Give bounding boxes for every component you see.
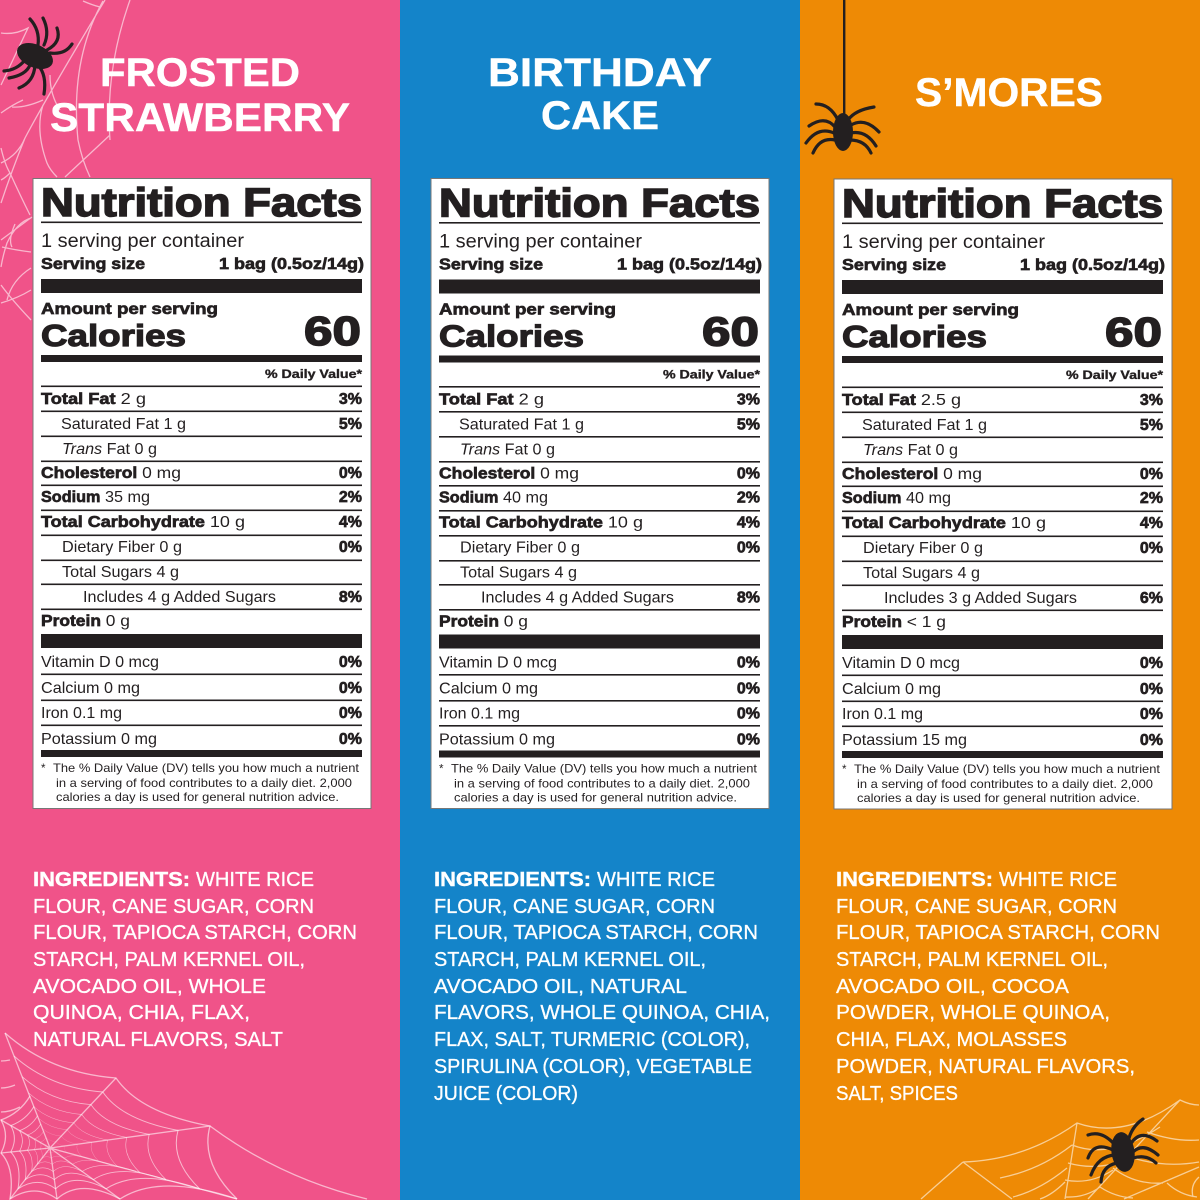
row: added sugars: 6% xyxy=(1140,590,1163,607)
row: calcium: 0% xyxy=(737,680,760,698)
footnote xyxy=(842,763,1161,805)
row: calcium: 0% xyxy=(1140,681,1163,698)
calories xyxy=(41,308,361,354)
row: iron xyxy=(41,705,362,722)
row: iron: 0% xyxy=(339,705,362,722)
row: total fat: 3% xyxy=(339,391,362,408)
row: total carbohydrate: 4% xyxy=(1140,515,1163,532)
row: vitamin d: 0% xyxy=(1140,655,1163,672)
row: iron: Iron 0.1 mg xyxy=(439,706,520,722)
ingredients: Birthday Cake: AVOCADO OIL, NATURAL xyxy=(434,975,687,998)
row: sodium: 2% xyxy=(737,490,760,506)
title: Frosted Strawberry xyxy=(50,51,350,140)
row: potassium: 0% xyxy=(1140,732,1163,749)
footnote: in a serving of food contributes to a daily diet. 2,000 xyxy=(857,778,1153,791)
footnote xyxy=(439,762,758,804)
row: added sugars: Includes 4 g Added Sugars xyxy=(481,590,674,606)
calories xyxy=(439,308,759,354)
row: calcium: Calcium 0 mg xyxy=(439,680,538,698)
row: trans fat: Trans Fat 0 g xyxy=(62,441,157,458)
ingredients: Birthday Cake: FLAX, SALT, TURMERIC (COLOR), xyxy=(434,1028,750,1051)
row: total fat: Total Fat 2 g xyxy=(439,392,544,408)
row: sodium xyxy=(842,490,1163,507)
ingredients: S'mores: AVOCADO OIL, COCOA xyxy=(836,975,1069,998)
row: cholesterol: Cholesterol 0 mg xyxy=(41,465,181,482)
ingredients: Birthday Cake: FLAVORS, WHOLE QUINOA, CHIA, xyxy=(434,1001,770,1024)
row: potassium xyxy=(842,732,1163,749)
ingredients: S'mores: STARCH, PALM KERNEL OIL, xyxy=(836,948,1108,971)
row: sodium: Sodium 40 mg xyxy=(842,490,951,507)
row: total fat: 3% xyxy=(1140,392,1163,409)
row: protein: Protein 0 g xyxy=(41,613,130,630)
row: vitamin d: Vitamin D 0 mcg xyxy=(439,654,557,672)
serving size xyxy=(41,256,364,273)
ingredients: Frosted Strawberry: INGREDIENTS: xyxy=(33,868,190,891)
serving size: Serving size xyxy=(41,256,145,273)
heading: Nutrition Facts: Nutrition Facts xyxy=(842,182,1163,226)
calories xyxy=(842,309,1162,355)
row: total sugars: Total Sugars 4 g xyxy=(62,564,179,581)
ingredients: Frosted Strawberry: AVOCADO OIL, WHOLE xyxy=(33,975,266,998)
calories: Calories xyxy=(41,318,186,353)
row: vitamin d: Vitamin D 0 mcg xyxy=(41,654,159,671)
title: Birthday Cake: BIRTHDAY xyxy=(488,51,712,95)
footnote: * xyxy=(842,763,847,776)
footnote: * xyxy=(439,762,444,776)
row: saturated fat: Saturated Fat 1 g xyxy=(61,416,186,433)
row: trans fat: Trans Fat 0 g xyxy=(460,442,555,458)
ingredients: Frosted Strawberry: QUINOA, CHIA, FLAX, xyxy=(33,1001,250,1024)
icon: hanging spider with thread xyxy=(806,0,879,153)
row: cholesterol: Cholesterol 0 mg xyxy=(439,466,579,482)
footnote: in a serving of food contributes to a daily diet. 2,000 xyxy=(454,778,750,790)
row: added sugars: Includes 3 g Added Sugars xyxy=(884,590,1077,607)
ingredients: Birthday Cake: JUICE (COLOR) xyxy=(434,1082,578,1105)
ingredients: Frosted Strawberry: STARCH, PALM KERNEL OIL, xyxy=(33,948,305,971)
ingredients: S'mores: CHIA, FLAX, MOLASSES xyxy=(836,1028,1067,1051)
row: cholesterol: Cholesterol 0 mg xyxy=(842,466,982,483)
row: iron: 0% xyxy=(1140,706,1163,723)
panel: blue background xyxy=(400,0,800,1200)
row: added sugars xyxy=(884,590,1163,607)
ingredients: S'mores xyxy=(836,868,1160,1105)
amount per serving: Amount per serving xyxy=(842,302,1019,319)
ingredients: Birthday Cake: WHITE RICE xyxy=(597,868,715,891)
serving size: 1 bag (0.5oz/14g) xyxy=(219,256,364,273)
row: cholesterol xyxy=(842,466,1163,483)
ingredients: Birthday Cake: INGREDIENTS: xyxy=(434,868,591,891)
row: saturated fat: 5% xyxy=(1140,417,1163,434)
icon: spider web top left xyxy=(1,0,130,320)
ingredients: Frosted Strawberry: FLOUR, TAPIOCA STARCH, CORN xyxy=(33,921,357,944)
ingredients: S'mores: SALT, SPICES xyxy=(836,1082,958,1105)
row: potassium: 0% xyxy=(339,731,362,748)
row: sodium: Sodium 40 mg xyxy=(439,490,548,506)
calories: Calories xyxy=(842,319,987,354)
calories: 60 xyxy=(304,308,361,354)
footnote xyxy=(41,762,360,804)
row: vitamin d xyxy=(439,654,760,672)
row: cholesterol: 0% xyxy=(737,466,760,482)
row: saturated fat: Saturated Fat 1 g xyxy=(862,417,987,434)
ingredients: S'mores: WHITE RICE xyxy=(999,868,1117,891)
ingredients: Birthday Cake: STARCH, PALM KERNEL OIL, xyxy=(434,948,706,971)
row: dietary fiber xyxy=(863,540,1163,557)
panel: orange background xyxy=(800,0,1200,1200)
heading: Nutrition Facts: Nutrition Facts xyxy=(41,181,362,225)
row: total sugars: Total Sugars 4 g xyxy=(460,564,577,582)
row: iron: Iron 0.1 mg xyxy=(41,705,122,722)
ingredients: Birthday Cake: FLOUR, TAPIOCA STARCH, CORN xyxy=(434,921,758,944)
row: total fat xyxy=(439,392,760,408)
row: total carbohydrate: 4% xyxy=(339,514,362,531)
row: potassium: Potassium 15 mg xyxy=(842,732,967,749)
ingredients: Birthday Cake: FLOUR, CANE SUGAR, CORN xyxy=(434,895,715,918)
row: cholesterol: 0% xyxy=(339,465,362,482)
icon: spider web bottom left xyxy=(1,1033,367,1199)
title: Birthday Cake xyxy=(488,51,712,138)
icon: spider top left xyxy=(4,18,72,94)
row: total carbohydrate: 4% xyxy=(737,514,760,532)
row: sodium: Sodium 35 mg xyxy=(41,489,150,506)
serving size: Serving size xyxy=(842,257,946,274)
row: added sugars xyxy=(481,590,760,606)
amount per serving: Amount per serving xyxy=(439,302,616,318)
row: total fat: 3% xyxy=(737,392,760,408)
row: saturated fat: 5% xyxy=(339,416,362,433)
row: dietary fiber: Dietary Fiber 0 g xyxy=(62,539,182,556)
icon: spider bottom right xyxy=(1088,1119,1158,1182)
row: total fat: Total Fat 2.5 g xyxy=(842,392,961,409)
row: dietary fiber: 0% xyxy=(737,540,760,556)
row: cholesterol: 0% xyxy=(1140,466,1163,483)
servings per container: 1 serving per container xyxy=(842,232,1046,253)
ingredients: S'mores: POWDER, NATURAL FLAVORS, xyxy=(836,1055,1135,1078)
row: total carbohydrate: Total Carbohydrate 10 g xyxy=(439,514,643,532)
row: total sugars: Total Sugars 4 g xyxy=(863,565,980,582)
row: dietary fiber: Dietary Fiber 0 g xyxy=(863,540,983,557)
row: calcium xyxy=(41,680,362,697)
row: iron: Iron 0.1 mg xyxy=(842,706,923,723)
ingredients: Frosted Strawberry: WHITE RICE xyxy=(196,868,314,891)
row: cholesterol xyxy=(41,465,362,482)
row: sodium: 2% xyxy=(339,489,362,506)
row: total fat: Total Fat 2 g xyxy=(41,391,146,408)
row: vitamin d: Vitamin D 0 mcg xyxy=(842,655,960,672)
row: potassium: Potassium 0 mg xyxy=(439,732,555,748)
panel: Birthday Cake nutrition label xyxy=(431,178,769,808)
ingredients: S'mores: POWDER, WHOLE QUINOA, xyxy=(836,1001,1110,1024)
row: added sugars: Includes 4 g Added Sugars xyxy=(83,589,276,606)
ingredients: Frosted Strawberry: FLOUR, CANE SUGAR, CORN xyxy=(33,895,314,918)
row: calcium xyxy=(439,680,760,698)
title: Frosted Strawberry: STRAWBERRY xyxy=(50,96,350,140)
row: potassium xyxy=(41,731,362,748)
row: saturated fat: 5% xyxy=(737,416,760,434)
serving size xyxy=(842,257,1165,274)
row: total carbohydrate xyxy=(842,515,1163,532)
daily value header: % Daily Value* xyxy=(265,369,363,381)
row: potassium: 0% xyxy=(737,732,760,748)
row: calcium: Calcium 0 mg xyxy=(842,681,941,698)
ingredients: Frosted Strawberry: NATURAL FLAVORS, SALT xyxy=(33,1028,283,1051)
title: S'mores: S’MORES xyxy=(915,71,1103,115)
row: added sugars xyxy=(83,589,362,606)
icon: spider web bottom right xyxy=(921,1100,1199,1199)
row: dietary fiber xyxy=(460,540,760,556)
servings per container: 1 serving per container xyxy=(41,231,245,252)
row: sodium xyxy=(41,489,362,506)
daily value header: % Daily Value* xyxy=(663,370,761,382)
row: total carbohydrate: Total Carbohydrate 10 g xyxy=(41,514,245,531)
row: vitamin d: 0% xyxy=(339,654,362,671)
footnote: * xyxy=(41,762,46,775)
footnote: calories a day is used for general nutrition advice. xyxy=(857,792,1140,805)
row: sodium xyxy=(439,490,760,506)
title: Birthday Cake: CAKE xyxy=(541,94,659,138)
row: saturated fat: Saturated Fat 1 g xyxy=(459,416,584,434)
row: total carbohydrate xyxy=(41,514,362,531)
serving size: 1 bag (0.5oz/14g) xyxy=(1020,257,1165,274)
panel: Frosted Strawberry nutrition label xyxy=(33,178,371,808)
ingredients: Birthday Cake: SPIRULINA (COLOR), VEGETABLE xyxy=(434,1055,752,1078)
row: total carbohydrate xyxy=(439,514,760,532)
row: potassium xyxy=(439,732,760,748)
row: added sugars: 8% xyxy=(737,590,760,606)
row: vitamin d: 0% xyxy=(737,654,760,672)
footnote: calories a day is used for general nutrition advice. xyxy=(56,791,339,804)
row: calcium: Calcium 0 mg xyxy=(41,680,140,697)
servings per container: 1 serving per container xyxy=(439,232,643,252)
row: iron: 0% xyxy=(737,706,760,722)
footnote: The % Daily Value (DV) tells you how much a nutrient xyxy=(854,763,1161,776)
panel: S'mores nutrition label xyxy=(834,179,1172,809)
row: trans fat: Trans Fat 0 g xyxy=(863,442,958,459)
footnote: The % Daily Value (DV) tells you how much a nutrient xyxy=(53,762,360,775)
row: calcium: 0% xyxy=(339,680,362,697)
row: protein: Protein 0 g xyxy=(439,614,528,630)
panel: pink background xyxy=(0,0,400,1200)
serving size: Serving size xyxy=(439,256,543,274)
row: dietary fiber: 0% xyxy=(339,539,362,556)
row: saturated fat xyxy=(61,416,362,433)
ingredients: S'mores: FLOUR, CANE SUGAR, CORN xyxy=(836,895,1117,918)
row: saturated fat xyxy=(459,416,760,434)
ingredients: S'mores: FLOUR, TAPIOCA STARCH, CORN xyxy=(836,921,1160,944)
daily value header: % Daily Value* xyxy=(1066,370,1164,382)
row: cholesterol xyxy=(439,466,760,482)
row: iron xyxy=(439,706,760,722)
calories: 60 xyxy=(1105,309,1162,355)
row: added sugars: 8% xyxy=(339,589,362,606)
row: dietary fiber xyxy=(62,539,362,556)
row: potassium: Potassium 0 mg xyxy=(41,731,157,748)
serving size: 1 bag (0.5oz/14g) xyxy=(617,256,762,274)
row: sodium: 2% xyxy=(1140,490,1163,507)
calories: 60 xyxy=(702,308,759,354)
ingredients: Frosted Strawberry xyxy=(33,868,357,1051)
row: total carbohydrate: Total Carbohydrate 10 g xyxy=(842,515,1046,532)
footnote: in a serving of food contributes to a daily diet. 2,000 xyxy=(56,777,352,790)
calories: Calories xyxy=(439,318,584,354)
serving size xyxy=(439,256,762,274)
row: protein: Protein < 1 g xyxy=(842,614,946,631)
footnote: The % Daily Value (DV) tells you how much a nutrient xyxy=(451,762,758,776)
row: vitamin d xyxy=(41,654,362,671)
row: calcium xyxy=(842,681,1163,698)
ingredients: S'mores: INGREDIENTS: xyxy=(836,868,993,891)
amount per serving: Amount per serving xyxy=(41,301,218,318)
row: vitamin d xyxy=(842,655,1163,672)
row: iron xyxy=(842,706,1163,723)
row: total fat xyxy=(842,392,1163,409)
heading: Nutrition Facts: Nutrition Facts xyxy=(439,182,760,226)
ingredients: Birthday Cake xyxy=(434,868,770,1105)
row: dietary fiber: Dietary Fiber 0 g xyxy=(460,540,580,556)
title: Frosted Strawberry: FROSTED xyxy=(100,51,300,95)
row: saturated fat xyxy=(862,417,1163,434)
row: dietary fiber: 0% xyxy=(1140,540,1163,557)
footnote: calories a day is used for general nutrition advice. xyxy=(454,792,737,804)
row: total fat xyxy=(41,391,362,408)
